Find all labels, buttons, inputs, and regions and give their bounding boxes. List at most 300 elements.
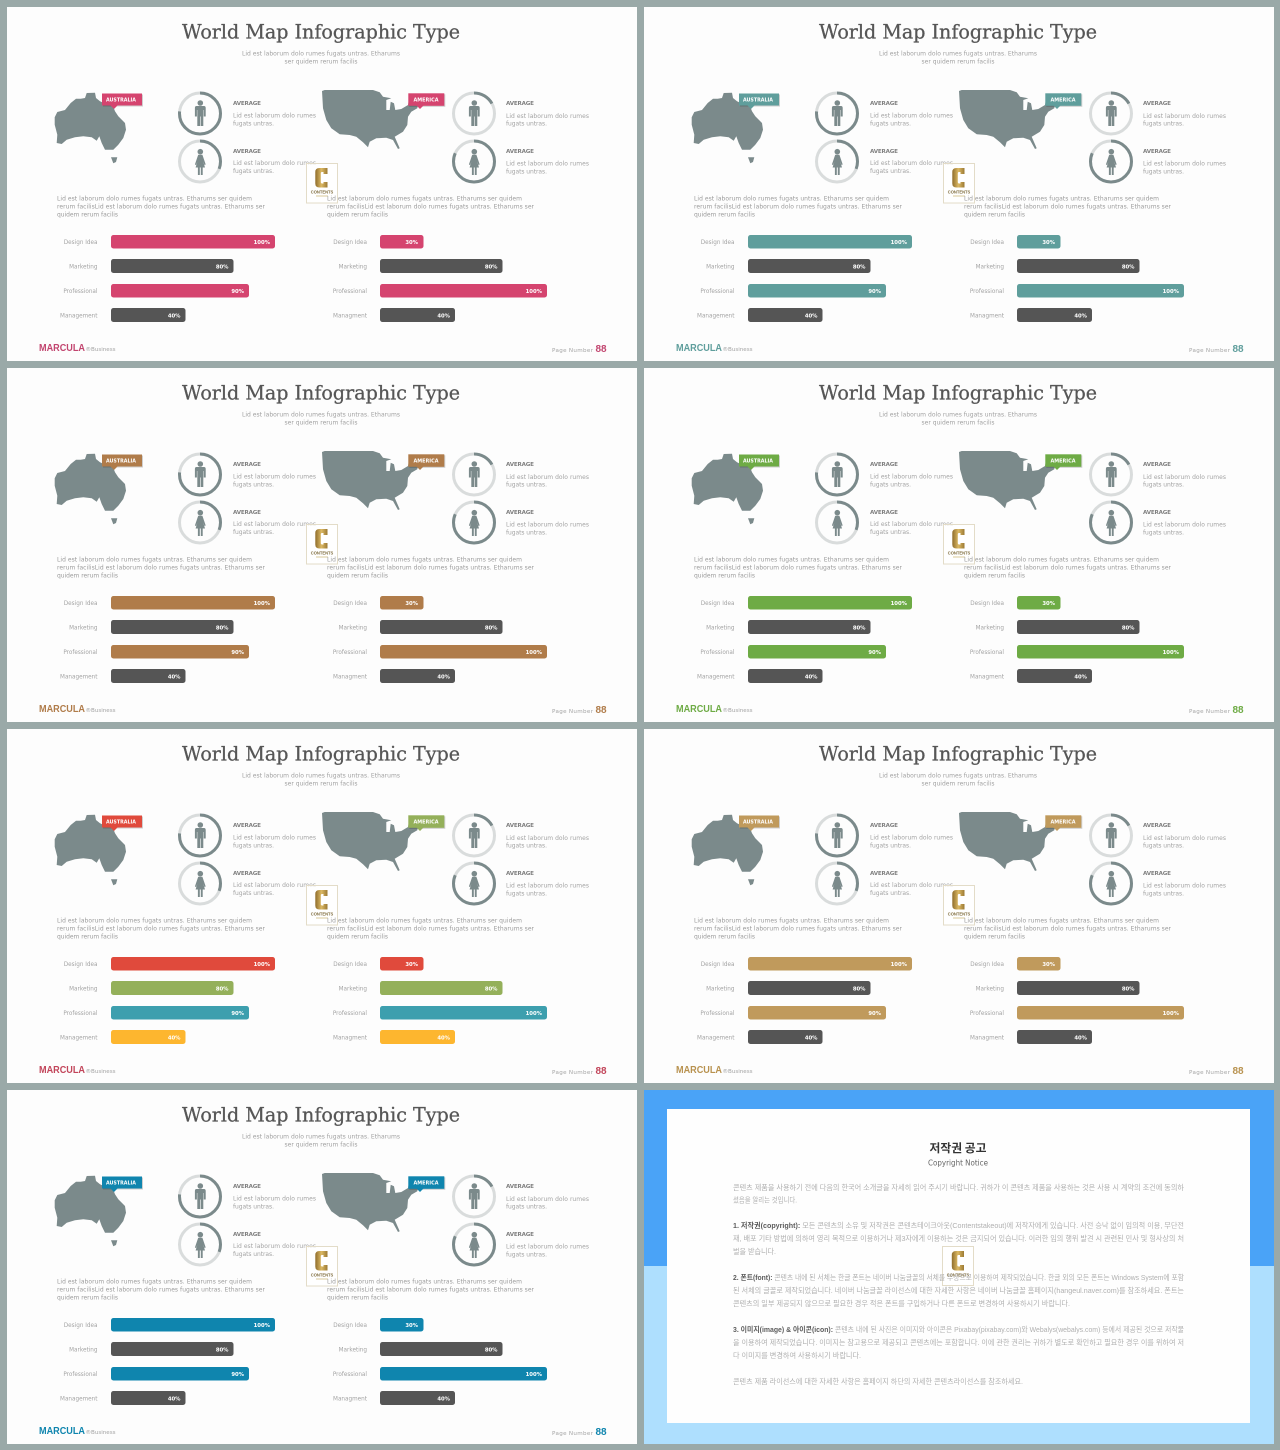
bar chart left: Design Idea [64,1323,98,1329]
paragraph left: Lid est laborum dolo rumes fugats untras. Etharums ser quidem [694,918,889,924]
paragraph right: rerum facilisLid est laborum dolo rumes fugats untras. Etharums ser [964,564,1172,572]
subtitle: Lid est laborum dolo rumes fugats untras. Etharums [879,412,1037,418]
subtitle: Lid est laborum dolo rumes fugats untras. Etharums [879,50,1037,58]
stat: woman left: AVERAGE [870,510,898,516]
tag: Australia: AUSTRALIA [106,1181,137,1187]
stat: man left: fugats untras. [233,482,274,488]
stat: woman left [816,863,953,904]
bar chart right [333,235,547,322]
bar chart right [333,957,547,1044]
bar chart right: Design Idea [333,240,367,246]
slide 7: blue [7,1090,637,1444]
stat: woman right: AVERAGE [506,871,534,877]
page number: Page Number [552,1431,594,1437]
notice section 1: 벌을 받습니다. [733,1247,776,1256]
brand: ®Business [86,707,116,714]
bar chart right: Marketing [339,264,367,270]
paragraph right: quidem rerum facilis [327,934,388,940]
bar chart left: Marketing [706,264,735,270]
bar chart left: Professional [700,650,735,656]
stat: man left: AVERAGE [870,101,898,107]
stat: woman left: Lid est laborum dolo rumes [870,160,953,167]
paragraph left [57,918,266,940]
bar chart left: 80% [216,1348,229,1354]
stat: man left: Lid est laborum dolo rumes [233,1196,316,1202]
notice intro: 콘텐츠 제품을 사용하기 전에 다음의 한국어 소개글을 자세히 읽어 주시기 바랍니다. 귀하가 이 콘텐츠 제품을 사용하는 것은 사용 시 계약의 조건에 동의하 [733,1183,1184,1192]
page number: 88 [596,1066,607,1077]
stat: woman left [180,863,316,904]
bar chart right: 40% [437,314,451,320]
page number: Page Number [1189,709,1231,715]
map: America [959,451,1055,510]
tag: Australia [102,816,143,831]
stat: woman right: fugats untras. [506,168,547,176]
stat: woman left: AVERAGE [233,1232,261,1238]
paragraph left: quidem rerum facilis [694,212,755,218]
stat: man right: AVERAGE [1143,462,1171,468]
stat: woman right: AVERAGE [506,510,534,516]
bar chart right: Design Idea [333,601,367,607]
stat: man right: AVERAGE [506,1184,534,1190]
bar chart right: Design Idea [970,240,1004,246]
paragraph left: Lid est laborum dolo rumes fugats untras. Etharums ser quidem [57,556,252,564]
bar chart right: 30% [405,1323,419,1329]
subtitle [242,412,400,426]
stamp [306,524,338,564]
bar chart left: Management [697,314,735,320]
bar chart right: 100% [526,1372,543,1378]
bar chart right: Design Idea [333,962,367,968]
page number [1189,344,1244,355]
bar chart left: 80% [216,264,229,270]
notice section 2: 2. 폰트(font): 콘텐츠 내에 된 서체는 한글 폰트는 네이버 나눔글꼴의 서체를 무상으로 이용하여 제작되었습니다. 한글 외의 모든 폰트는 Windows System에 포함 [733,1273,1184,1282]
bar chart left: Professional [63,650,98,656]
stat: man right [454,93,589,134]
page number: 88 [596,705,607,716]
stat: woman left: Lid est laborum dolo rumes [870,882,953,889]
paragraph left: rerum facilisLid est laborum dolo rumes fugats untras. Etharums ser [694,204,903,210]
brand [39,1064,116,1076]
paragraph left [694,196,903,218]
bar chart right: 30% [1042,962,1056,968]
paragraph left [57,556,266,580]
paragraph right [964,918,1172,940]
notice footer: 콘텐츠 제품 라이선스에 대한 자세한 사항은 홈페이지 하단의 자세한 콘텐츠라이선스를 참조하세요. [733,1377,1023,1386]
notice section 3: 을 이용하여 제작되었습니다. 이미지는 참고용으로 제공되고 콘텐츠에는 포함합니다. 이에 관한 권리는 귀하가 별도로 확인하고 필요한 경우 이를 위하여 저 [733,1338,1184,1347]
stat: man right [1090,93,1226,134]
paragraph right: rerum facilisLid est laborum dolo rumes fugats untras. Etharums ser [327,926,535,932]
stat: man left: AVERAGE [870,823,898,829]
title: World Map Infographic Type [182,20,460,44]
stat: man right: AVERAGE [506,462,534,468]
map: Australia [692,93,763,163]
paragraph right [964,556,1172,580]
stat: man right: fugats untras. [506,120,547,128]
bar chart right: 100% [526,289,543,295]
notice section 3: 3. 이미지(image) & 아이콘(icon): 콘텐츠 내에 된 사진은 이미지와 아이콘은 Pixabay(pixabay.com)와 Webalys(webalys.com) 등에서 제공된 것으로 저작물 [733,1325,1184,1334]
stat: man left [816,93,953,134]
paragraph right: quidem rerum facilis [964,934,1025,940]
stat: man left: AVERAGE [233,1184,261,1190]
brand: MARCULA [676,1064,722,1076]
bar chart right [333,1318,547,1405]
stat: man right: fugats untras. [1143,842,1184,850]
page number [552,344,607,355]
paragraph right: Lid est laborum dolo rumes fugats untras. Etharums ser quidem [327,556,522,564]
subtitle [242,772,400,788]
bar chart left: 100% [254,962,271,968]
tag: Australia: AUSTRALIA [106,820,137,826]
brand: ®Business [722,346,753,353]
brand [676,1064,753,1076]
page number: Page Number [1189,348,1231,354]
stat: woman left [816,141,953,182]
tag: America: AMERICA [1050,98,1076,104]
notice section 1: 재, 배포 기타 방법에 의하여 영리 목적으로 이용하거나 제3자에게 이용하는 것은 금지되어 있습니다. 이러한 임의 행위 발견 시 관련된 민사 및 형사상의 처 [733,1234,1184,1243]
bar chart right: Marketing [339,1348,367,1354]
bar chart left [697,235,912,322]
stat: woman left: Lid est laborum dolo rumes [870,521,953,528]
bar chart right: Marketing [339,986,367,992]
stat: woman left: Lid est laborum dolo rumes [233,160,316,167]
stat: woman left: AVERAGE [233,149,261,155]
bar chart left: Marketing [69,626,98,632]
stat: man right: fugats untras. [1143,120,1184,128]
bar chart right: Professional [333,1011,367,1017]
bar chart right: 30% [1042,601,1056,607]
stat: woman left: Lid est laborum dolo rumes [233,1243,316,1250]
paragraph right: quidem rerum facilis [964,212,1025,218]
stat: man right: AVERAGE [506,823,534,829]
stamp: CONTENTS [311,1272,334,1278]
stat: man right: fugats untras. [506,482,547,488]
bar chart right: Managment [333,1396,368,1402]
tag: America [1045,93,1082,109]
paragraph right: Lid est laborum dolo rumes fugats untras. Etharums ser quidem [327,196,522,202]
tag: America [408,454,445,470]
bar chart left: 100% [254,1323,271,1329]
subtitle: ser quidem rerum facilis [922,58,994,66]
stat: man right [1090,815,1226,856]
paragraph left: Lid est laborum dolo rumes fugats untras. Etharums ser quidem [57,196,252,202]
paragraph left: rerum facilisLid est laborum dolo rumes fugats untras. Etharums ser [694,564,903,572]
stamp [306,886,338,925]
stat: man left: Lid est laborum dolo rumes [233,834,316,842]
stat: man right: Lid est laborum dolo rumes [506,474,589,481]
subtitle: ser quidem rerum facilis [922,780,994,788]
slide 3: brown [7,368,637,722]
paragraph left: rerum facilisLid est laborum dolo rumes fugats untras. Etharums ser [57,1286,266,1294]
stat: woman right: Lid est laborum dolo rumes [506,522,589,528]
notice section 2: 콘텐츠의 일부 제공되지 않으므로 필요한 경우 적은 폰트를 구입하거나 다른 폰트로 변경하여 사용하시기 바랍니다. [733,1299,1070,1308]
stat: woman right: AVERAGE [1143,149,1171,155]
tag: Australia [102,1176,143,1192]
bar chart right: 40% [437,674,451,680]
bar chart left: 100% [254,240,271,246]
bar chart left: 80% [853,264,866,270]
brand: MARCULA [39,703,85,715]
notice section 1: 1. 저작권(copyright): 모든 콘텐츠의 소유 및 저작권은 콘텐츠테이크아웃(Contentstakeout)에 저작자에게 있습니다. 사전 승낙 없이 임의적 이용, 무단전 [733,1221,1184,1230]
stat: woman left [816,502,953,543]
bar chart left: 40% [805,674,818,680]
bar chart right: Managment [970,674,1005,680]
tag: America: AMERICA [1050,820,1076,826]
bar chart right: 40% [437,1036,451,1042]
bar chart right: 30% [1042,240,1056,246]
stat: woman right [454,141,589,182]
paragraph left: quidem rerum facilis [57,1294,118,1302]
bar chart left: 80% [216,626,229,632]
subtitle [879,50,1037,66]
bar chart right [333,596,547,683]
stat: woman right [454,1224,589,1265]
stat: man right: Lid est laborum dolo rumes [1143,835,1226,842]
brand: MARCULA [39,1425,85,1437]
subtitle: Lid est laborum dolo rumes fugats untras. Etharums [242,1134,400,1140]
slide 1: crimson [7,7,637,361]
stat: woman left [180,1224,316,1265]
bar chart left: 100% [891,962,908,968]
tag: America [408,815,445,831]
paragraph right: Lid est laborum dolo rumes fugats untras. Etharums ser quidem [327,918,522,924]
paragraph left: rerum facilisLid est laborum dolo rumes fugats untras. Etharums ser [694,926,903,932]
stat: woman left: fugats untras. [233,529,274,536]
subtitle [879,412,1037,426]
bar chart left: Professional [700,1011,735,1017]
bar chart right: Design Idea [970,601,1004,607]
bar chart left: 90% [231,289,245,295]
tag: America: AMERICA [414,98,439,104]
bar chart right: Marketing [339,626,367,632]
brand: ®Business [86,346,116,353]
bar chart left [697,596,912,683]
bar chart right: 40% [1074,674,1088,680]
bar chart left [60,596,275,683]
bar chart right: 80% [1122,626,1135,632]
paragraph right: rerum facilisLid est laborum dolo rumes fugats untras. Etharums ser [327,204,535,210]
paragraph right: quidem rerum facilis [327,1294,388,1302]
page number: Page Number [552,709,594,715]
stat: man right [454,454,589,495]
stat: woman right: AVERAGE [1143,510,1171,516]
paragraph right [327,556,535,580]
stat: man left: fugats untras. [870,482,911,488]
subtitle [879,772,1037,788]
slide 5: multicolour [7,729,637,1083]
title: World Map Infographic Type [182,1102,460,1126]
bar chart right: 80% [1122,986,1135,992]
page number: Page Number [552,1070,594,1076]
stat: man left: AVERAGE [870,462,898,468]
bar chart left: Professional [63,1372,98,1378]
stat: man left [180,1176,316,1217]
slide 8: copyright notice [644,1090,1274,1444]
bar chart left: 90% [231,1011,245,1017]
bar chart right [970,596,1184,683]
page number: 88 [596,1427,607,1438]
stat: woman left [180,502,316,543]
stat: man left [180,815,316,856]
paragraph right: rerum facilisLid est laborum dolo rumes fugats untras. Etharums ser [327,1286,535,1294]
bar chart right: Design Idea [333,1323,367,1329]
bar chart right: 40% [437,1396,451,1402]
bar chart left: Professional [700,289,735,295]
bar chart right: 30% [405,240,419,246]
stamp [944,524,974,564]
bar chart right: Professional [333,1372,367,1378]
bar chart right [970,235,1184,322]
brand: ®Business [722,707,753,714]
tag: Australia: AUSTRALIA [743,820,774,826]
tag: Australia: AUSTRALIA [743,459,774,465]
stat: woman right: fugats untras. [1143,530,1184,536]
bar chart left [60,957,275,1044]
bar chart left: Management [697,1036,735,1042]
subtitle [242,50,400,66]
stamp: CONTENTS [948,550,971,556]
tag: America [1045,454,1082,470]
paragraph right: quidem rerum facilis [327,572,388,580]
notice section 3 [733,1325,1184,1360]
stat: woman right: Lid est laborum dolo rumes [506,160,589,168]
stat: woman right [454,863,589,904]
map: Australia [55,454,126,524]
stat: man left: Lid est laborum dolo rumes [870,834,953,842]
bar chart left: 80% [216,986,229,992]
notice section 2 [733,1273,1184,1308]
stat: man right: Lid est laborum dolo rumes [1143,474,1226,481]
stat: woman left: fugats untras. [233,890,274,897]
stat: woman left: AVERAGE [233,871,261,877]
paragraph left [694,918,903,940]
bar chart right: 40% [1074,314,1088,320]
stat: woman left: fugats untras. [233,1251,274,1258]
tag: Australia [102,454,143,470]
notice section 2: 된 서체의 글꼴로 제작되었습니다. 네이버 나눔글꼴 라이선스에 대한 자세한 사항은 네이버 나눔글꼴 홈페이지(hangeul.naver.com)를 참조하세요. 폰트는 [733,1286,1184,1295]
bar chart right: Managment [333,1036,368,1042]
stat: man right [1090,454,1226,495]
stat: woman right [1090,141,1226,182]
paragraph left: rerum facilisLid est laborum dolo rumes fugats untras. Etharums ser [57,564,266,572]
paragraph left: Lid est laborum dolo rumes fugats untras. Etharums ser quidem [57,918,252,924]
stat: man left: fugats untras. [233,842,274,850]
brand [676,703,753,715]
stat: woman right: AVERAGE [506,149,534,155]
subtitle: Lid est laborum dolo rumes fugats untras. Etharums [879,772,1037,780]
map: Australia [55,93,126,163]
brand [39,1425,116,1437]
brand: MARCULA [39,1064,85,1076]
stat: woman right: fugats untras. [506,1252,547,1258]
page number [552,1427,607,1438]
title: World Map Infographic Type [819,20,1097,44]
stat: woman left [180,141,316,182]
bar chart right: Professional [970,650,1004,656]
bar chart right: 100% [1163,650,1180,656]
bar chart left: 40% [168,1396,181,1402]
stat: woman right: AVERAGE [1143,871,1171,877]
subtitle: ser quidem rerum facilis [922,420,994,426]
stat: man left: AVERAGE [233,823,261,829]
subtitle: ser quidem rerum facilis [284,420,358,426]
panel: notice [667,1109,1250,1423]
brand: ®Business [722,1068,753,1075]
map: Australia [692,815,763,885]
bar chart left: 90% [231,650,245,656]
paragraph right: rerum facilisLid est laborum dolo rumes fugats untras. Etharums ser [327,564,535,572]
bar chart left: Professional [63,1011,98,1017]
map: Australia [55,1176,126,1246]
page number: 88 [1232,705,1244,716]
stat: man right: Lid est laborum dolo rumes [506,113,589,120]
bar chart right: 40% [1074,1036,1088,1042]
stat: man left [816,454,953,495]
page number [552,1066,607,1077]
page number: 88 [596,344,607,355]
stamp: CONTENTS [311,550,334,556]
stat: woman right: Lid est laborum dolo rumes [1143,522,1226,528]
stat: man left: fugats untras. [870,120,911,128]
stat: woman right [1090,863,1226,904]
bar chart left: Design Idea [64,962,98,968]
notice section 3: 다 이미지를 변경하여 사용하시기 바랍니다. [733,1351,861,1360]
bar chart right: Marketing [976,986,1004,992]
page number [552,705,607,716]
bar chart left: Design Idea [701,240,734,246]
stat: woman left: AVERAGE [233,510,261,516]
bar chart left: Management [697,674,735,680]
bar chart right: 100% [1163,289,1180,295]
tag: America: AMERICA [414,820,439,826]
bar chart left: Design Idea [64,240,98,246]
paragraph left: rerum facilisLid est laborum dolo rumes fugats untras. Etharums ser [57,926,266,932]
map: America [322,451,418,510]
subtitle: ser quidem rerum facilis [284,780,358,788]
bar chart right: Professional [333,289,367,295]
bar chart left: 100% [891,240,908,246]
bar chart left: Marketing [69,1348,98,1354]
subtitle: ser quidem rerum facilis [284,58,358,66]
stamp [942,1246,974,1286]
stamp: CONTENTS [948,190,971,194]
stat: man left: Lid est laborum dolo rumes [233,112,316,120]
stamp: CONTENTS [311,912,334,916]
tag: Australia [739,816,780,831]
paragraph right: Lid est laborum dolo rumes fugats untras. Etharums ser quidem [327,1278,522,1286]
bar chart right [970,957,1184,1044]
subtitle: ser quidem rerum facilis [284,1142,358,1148]
stat: man left [180,93,316,134]
stamp [944,164,974,203]
bar chart left: 90% [868,1011,882,1017]
bar chart right: 80% [1122,264,1135,270]
bar chart left [60,1318,275,1405]
stat: man right: Lid est laborum dolo rumes [1143,113,1226,120]
page number: 88 [1232,1066,1244,1077]
notice title: 저작권 공고 [930,1140,987,1156]
notice intro [733,1183,1184,1204]
paragraph right: Lid est laborum dolo rumes fugats untras. Etharums ser quidem [964,918,1159,924]
bar chart left: Design Idea [64,601,98,607]
stat: man right: AVERAGE [1143,101,1171,107]
bar chart left: 90% [868,650,882,656]
page number [1189,705,1244,716]
paragraph left: quidem rerum facilis [694,572,755,580]
stat: woman left: fugats untras. [870,529,911,536]
stat: woman right: Lid est laborum dolo rumes [1143,160,1226,168]
stat: man left: AVERAGE [233,101,261,107]
stat: man right: Lid est laborum dolo rumes [506,1196,589,1203]
